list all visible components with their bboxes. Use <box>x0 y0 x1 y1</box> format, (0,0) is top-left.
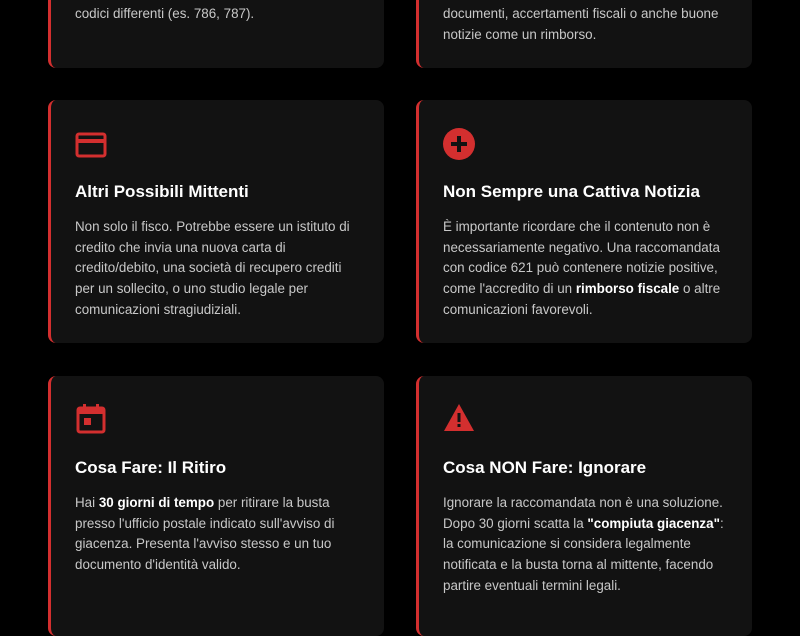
heading: Non Sempre una Cattiva Notizia <box>443 182 700 201</box>
icon: calendar <box>76 404 106 434</box>
text: top left: codici differenti (es. 786, 787). <box>75 6 254 21</box>
icon: plus circle <box>443 128 475 160</box>
body text: Ignorare la raccomandata non è una soluzione. Dopo 30 giorni scatta la "compiuta giacenza": la comunicazione si considera legalmente notificata e la busta torna al mittente, facendo partire eventuali termini legali. <box>443 495 724 593</box>
heading: Cosa Fare: Il Ritiro <box>75 458 226 477</box>
card: top left (partial) <box>48 0 384 68</box>
body text: È importante ricordare che il contenuto non è necessariamente negativo. Una raccomandata con codice 621 può contenere notizie positive, come l'accredito di un rimborso fiscale o altre comunicazioni favorevoli. <box>443 219 720 317</box>
body text: Non solo il fisco. Potrebbe essere un istituto di credito che invia una nuova carta di credito/debito, una società di recupero crediti per un sollecito, o uno studio legale per comunicazioni stragiudiziali. <box>75 219 350 317</box>
card: top right (partial) <box>416 0 752 68</box>
card: cosa non fare <box>416 376 752 636</box>
card: cosa fare <box>48 376 384 636</box>
heading: Altri Possibili Mittenti <box>75 182 249 201</box>
text: top right: documenti, accertamenti fiscali o anche buone notizie come un rimborso. <box>443 6 718 42</box>
card: non sempre una cattiva notizia <box>416 100 752 343</box>
icon: credit card <box>76 132 106 158</box>
card: altri possibili mittenti <box>48 100 384 343</box>
icon: warning <box>444 404 474 431</box>
heading: Cosa NON Fare: Ignorare <box>443 458 646 477</box>
body text: Hai 30 giorni di tempo per ritirare la busta presso l'ufficio postale indicato sull'avviso di giacenza. Presenta l'avviso stesso e un tuo documento d'identità valido. <box>75 495 334 572</box>
